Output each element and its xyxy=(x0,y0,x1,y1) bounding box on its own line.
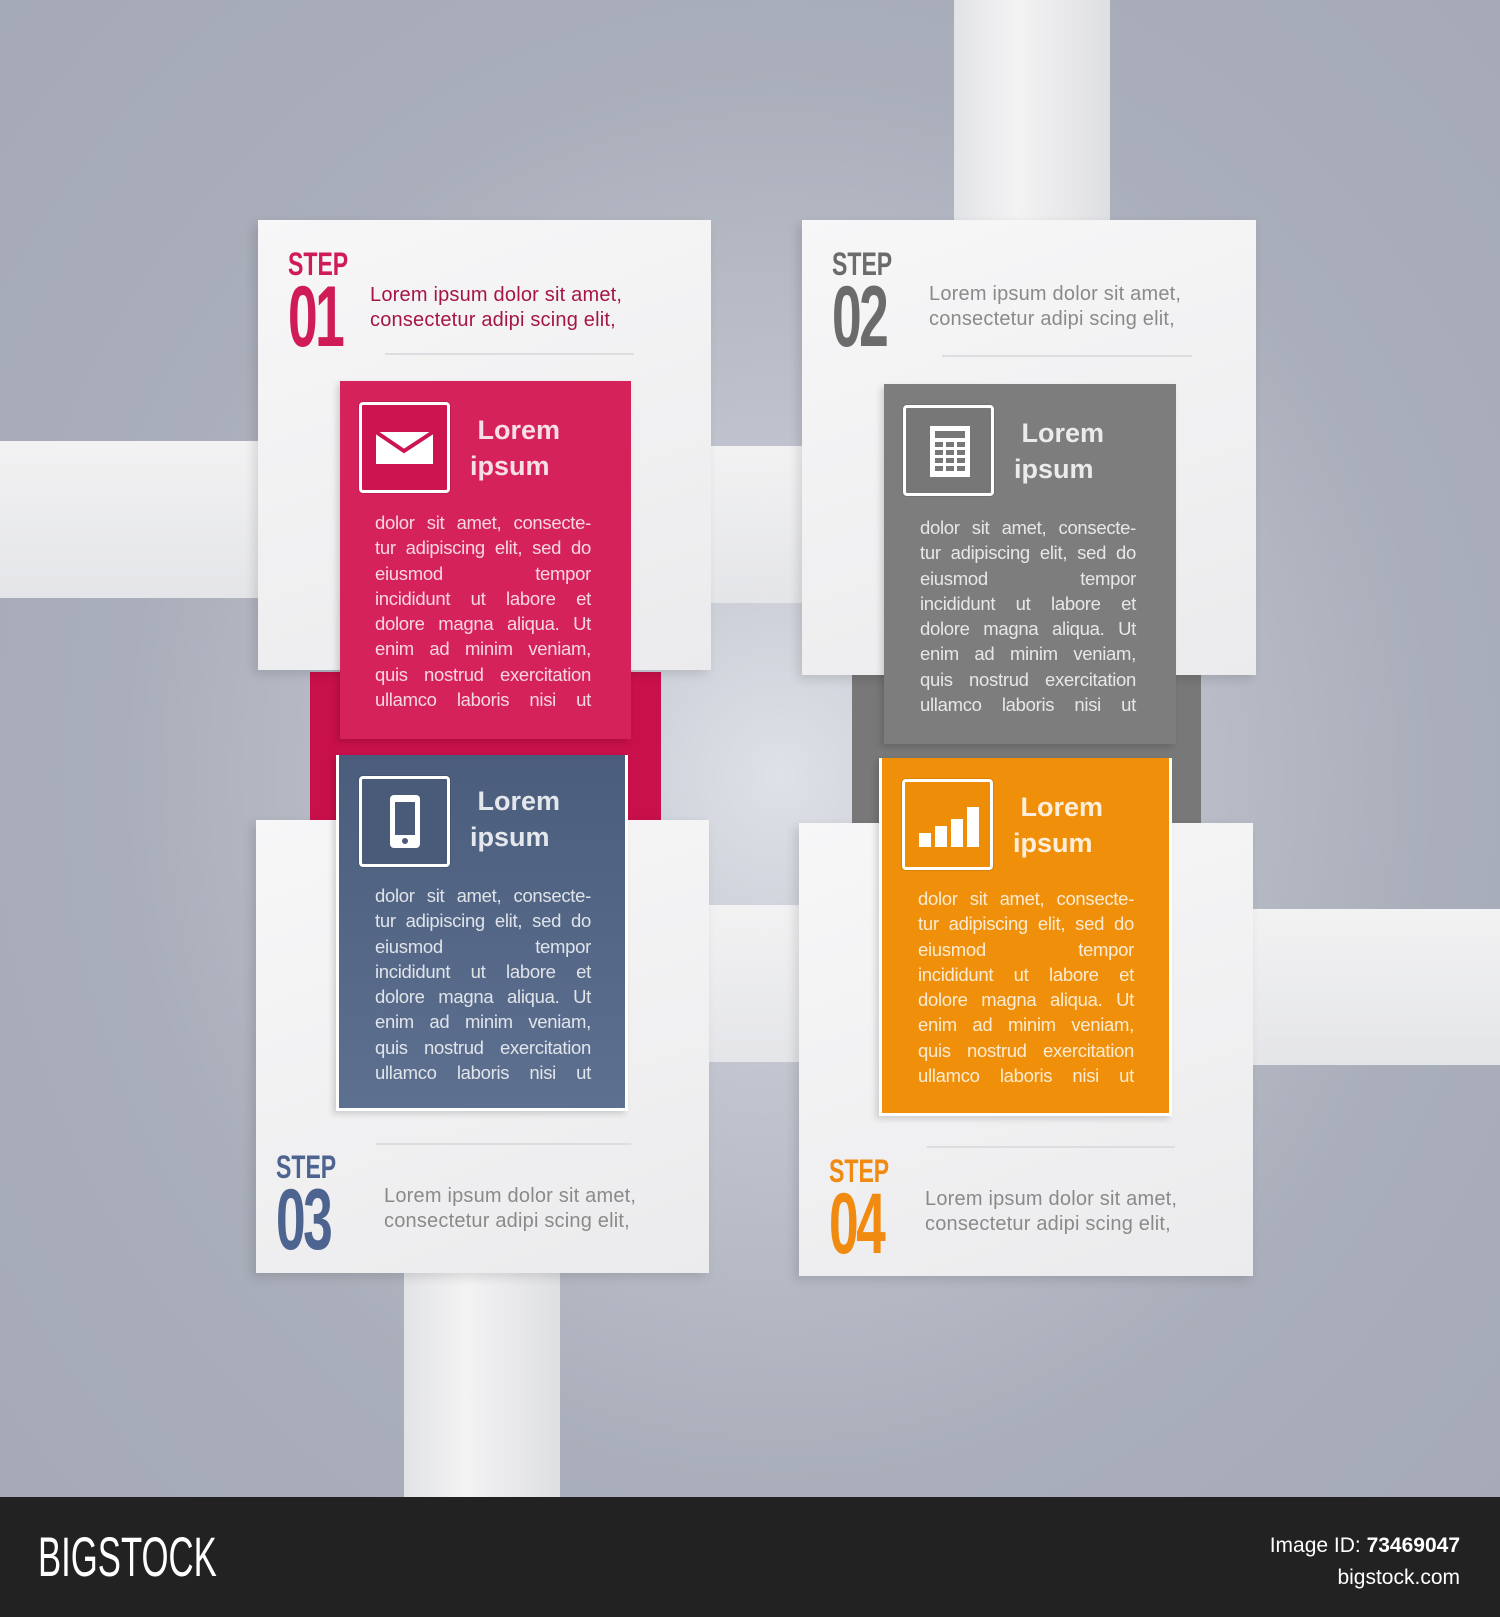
step 02 label: 02 xyxy=(832,269,886,365)
body text: dolor sit amet, consecte- xyxy=(920,517,1136,538)
step 03 caption: consectetur adipi scing elit, xyxy=(384,1210,630,1232)
body text: dolore magna aliqua. Ut xyxy=(920,618,1136,639)
body text: eiusmod tempor xyxy=(375,563,591,584)
panel: step 04 card xyxy=(799,823,1253,1276)
band: red connector xyxy=(310,672,661,820)
body text: enim ad minim veniam, xyxy=(920,643,1136,664)
step 02 caption xyxy=(929,283,1181,330)
body text: dolore magna aliqua. Ut xyxy=(375,613,591,634)
body text: ullamco laboris nisi ut xyxy=(375,689,591,710)
body text: tur adipiscing elit, sed do xyxy=(920,542,1136,563)
body text: tur adipiscing elit, sed do xyxy=(375,910,591,931)
body text: dolor sit amet, consecte- xyxy=(375,512,591,533)
body text: dolor sit amet, consecte- xyxy=(375,885,591,906)
title: Lorem xyxy=(478,415,560,445)
body text: ullamco laboris nisi ut xyxy=(375,1062,591,1083)
step 04 caption: Lorem ipsum dolor sit amet, xyxy=(925,1188,1177,1210)
step 01 caption: consectetur adipi scing elit, xyxy=(370,308,616,330)
step 02 label: STEP xyxy=(832,246,892,282)
step 01 label: 01 xyxy=(288,269,342,365)
body text xyxy=(375,512,592,710)
footer logo: BIGSTOCK xyxy=(38,1525,217,1588)
step 04 label: STEP xyxy=(829,1153,889,1189)
band: gray connector xyxy=(852,675,1201,823)
title xyxy=(1013,792,1103,858)
background strips xyxy=(954,0,1110,220)
step 04 label: 04 xyxy=(829,1176,883,1272)
body text: tur adipiscing elit, sed do xyxy=(918,913,1134,934)
icon: phone xyxy=(359,776,450,867)
body text: quis nostrud exercitation xyxy=(375,1037,591,1058)
panel: orange content box xyxy=(879,758,1172,1116)
title: ipsum xyxy=(470,822,550,852)
icon: calculator xyxy=(903,405,994,496)
panel: step 01 card xyxy=(258,220,711,670)
title: Lorem xyxy=(478,786,560,816)
step 01 label: STEP xyxy=(288,246,348,282)
title xyxy=(1014,418,1104,484)
icon: envelope xyxy=(359,402,450,493)
body text: ullamco laboris nisi ut xyxy=(920,694,1136,715)
footer image id: Image ID: 73469047 xyxy=(1270,1534,1460,1557)
body text: dolor sit amet, consecte- xyxy=(918,888,1134,909)
title xyxy=(470,786,560,852)
step 01 caption xyxy=(370,284,622,330)
body text: enim ad minim veniam, xyxy=(375,1011,591,1032)
step 03 caption: Lorem ipsum dolor sit amet, xyxy=(384,1185,636,1207)
body text: quis nostrud exercitation xyxy=(920,669,1136,690)
step 03 label: STEP xyxy=(276,1149,336,1185)
footer bar xyxy=(0,1497,1500,1617)
body text: incididunt ut labore et xyxy=(918,964,1134,985)
title: ipsum xyxy=(1013,828,1093,858)
step 02 caption: consectetur adipi scing elit, xyxy=(929,308,1175,330)
body text xyxy=(375,885,592,1083)
title: Lorem xyxy=(1020,792,1103,822)
body text: enim ad minim veniam, xyxy=(918,1014,1134,1035)
panel: red content box xyxy=(340,381,631,739)
body text: incididunt ut labore et xyxy=(375,588,591,609)
step 04 caption xyxy=(925,1188,1177,1234)
panel: step 02 card xyxy=(802,220,1256,675)
panel: blue content box xyxy=(336,755,628,1111)
icon: bar chart xyxy=(902,779,993,870)
body text: incididunt ut labore et xyxy=(375,961,591,982)
title: ipsum xyxy=(1014,454,1094,484)
body text: ullamco laboris nisi ut xyxy=(918,1065,1134,1086)
step 03 label: 03 xyxy=(276,1172,330,1268)
panel: gray content box xyxy=(884,384,1176,744)
step 02 caption: Lorem ipsum dolor sit amet, xyxy=(929,283,1181,305)
title: ipsum xyxy=(470,451,550,481)
body text: enim ad minim veniam, xyxy=(375,638,591,659)
body text: dolore magna aliqua. Ut xyxy=(375,986,591,1007)
body text: quis nostrud exercitation xyxy=(918,1040,1134,1061)
title: Lorem xyxy=(1022,418,1104,448)
body text: eiusmod tempor xyxy=(920,568,1136,589)
body text xyxy=(918,888,1134,1086)
title xyxy=(470,415,560,481)
footer image id: bigstock.com xyxy=(1337,1566,1460,1589)
footer image id xyxy=(1270,1534,1460,1589)
body text: incididunt ut labore et xyxy=(920,593,1136,614)
panel: step 03 card xyxy=(256,820,709,1273)
body text: eiusmod tempor xyxy=(375,936,591,957)
body text: dolore magna aliqua. Ut xyxy=(918,989,1134,1010)
body text: eiusmod tempor xyxy=(918,939,1134,960)
step 03 caption xyxy=(384,1185,636,1232)
body text: tur adipiscing elit, sed do xyxy=(375,537,591,558)
step 04 caption: consectetur adipi scing elit, xyxy=(925,1212,1171,1234)
body text xyxy=(920,517,1136,715)
step 01 caption: Lorem ipsum dolor sit amet, xyxy=(370,284,622,306)
body text: quis nostrud exercitation xyxy=(375,664,591,685)
